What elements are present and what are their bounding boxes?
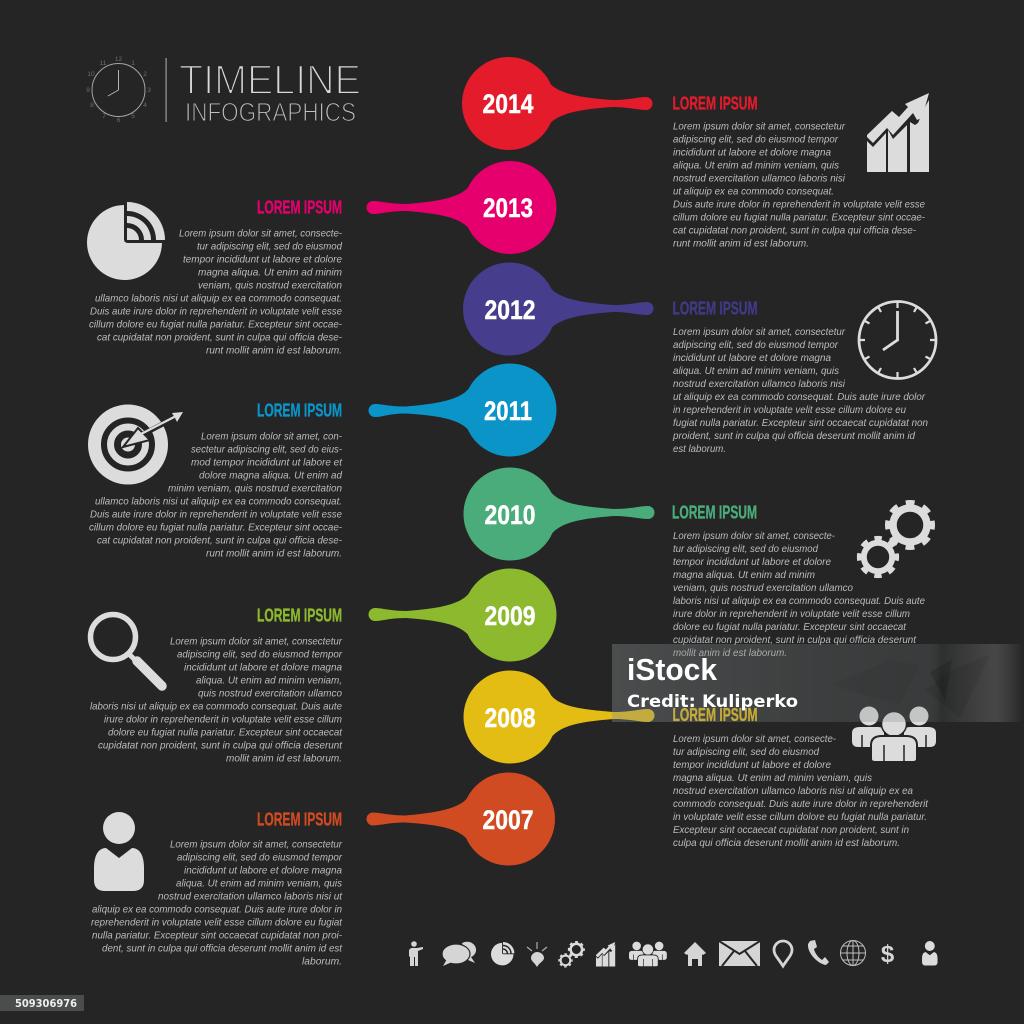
text block: Duis aute irure dolor in reprehenderit in voluptate velit esse	[90, 508, 342, 520]
heading: LOREM IPSUM	[672, 705, 758, 725]
heading: TIMELINE: TIMELINE	[179, 56, 361, 103]
text block: veniam, quis nostrud exercitation ullamco	[673, 582, 853, 594]
icon: gears	[859, 502, 932, 576]
text block: Lorem ipsum dolor sit amet, consecte-	[179, 228, 342, 240]
text block: ut aliquip ex ea commodo consequat.	[673, 186, 834, 198]
year marker: 2010: 2010	[484, 500, 536, 530]
text block	[90, 636, 343, 764]
text block: tempor incididunt ut labore et dolore	[673, 556, 831, 568]
text block	[89, 430, 343, 560]
panel: 2009	[90, 606, 343, 764]
subheading: INFOGRAPHICS: INFOGRAPHICS	[185, 97, 356, 127]
year marker: 2008	[464, 670, 655, 764]
text block: adipiscing elit, sed do eiusmod tempor	[673, 134, 838, 146]
text block: Lorem ipsum dolor sit amet, consectetur	[673, 120, 845, 132]
icon: small clock: 5	[131, 113, 135, 120]
icon: small clock: 1	[131, 60, 135, 67]
icon: people	[629, 942, 667, 967]
panel: 2011	[89, 400, 343, 560]
text block: reprehenderit in voluptate velit esse cillum dolore eu fugiat	[91, 916, 343, 928]
year marker: 2009: 2009	[484, 601, 536, 631]
text block: laborum.	[302, 956, 342, 968]
icon: small clock: 12	[115, 56, 122, 63]
year marker: 2007	[366, 772, 555, 866]
text block: incididunt ut labore et dolore magna	[673, 352, 831, 364]
text block: nostrud exercitation ullamco laboris nisi ut aliquip ex ea	[673, 785, 913, 797]
year marker: 2009	[369, 568, 556, 662]
text block: cupidatat non proident, sunt in culpa qui officia deserunt	[98, 740, 343, 752]
text block: irure dolor in reprehenderit in voluptate velit esse cillum	[673, 608, 910, 620]
text block: fugiat nulla pariatur. Excepteur sint occaecat cupidatat non	[673, 417, 928, 429]
panel: 2008	[672, 705, 936, 849]
text block: Lorem ipsum dolor sit amet, consectetur	[673, 326, 845, 338]
text block: mollit anim id est laborum.	[673, 647, 787, 659]
icon: clock	[859, 302, 936, 378]
text block: incididunt ut labore et dolore magna	[184, 662, 342, 674]
text block: magna aliqua. Ut enim ad minim	[198, 266, 342, 278]
icon: small clock: 10	[87, 71, 95, 78]
icon: small clock: 11	[100, 60, 107, 67]
text block: aliqua. Ut enim ad minim veniam, quis	[673, 365, 840, 377]
text block: veniam, quis nostrud exercitation	[198, 280, 342, 292]
text block: irure dolor in reprehenderit in voluptate velit esse cillum	[104, 714, 342, 726]
icon: chart	[596, 942, 615, 967]
icon: globe	[840, 940, 866, 966]
year marker: 2008: 2008	[484, 703, 536, 733]
credit line: Credit: Kuliperko	[627, 692, 798, 712]
text block: cillum dolore eu fugiat nulla pariatur. Excepteur sint occae-	[673, 212, 925, 224]
text block: minim veniam, quis nostrud exercitation	[168, 482, 342, 494]
text block: Lorem ipsum dolor sit amet, consecte-	[673, 733, 836, 745]
text block: in reprehenderit in voluptate velit esse cillum dolore eu	[673, 404, 906, 416]
year marker: 2010	[464, 468, 655, 560]
panel: 2012	[672, 298, 936, 455]
icon: pie chart	[491, 942, 514, 965]
title block	[86, 56, 361, 127]
icon: phone	[808, 940, 829, 965]
text block	[673, 733, 929, 849]
heading: LOREM IPSUM	[257, 198, 342, 218]
text block: incididunt ut labore et dolore magna	[184, 864, 342, 876]
heading: LOREM IPSUM	[257, 400, 342, 420]
text block: tur adipiscing elit, sed do eiusmod	[673, 543, 819, 555]
panel: 2007	[91, 810, 343, 968]
iStock logo: iStock	[627, 652, 718, 687]
year marker: 2014: 2014	[482, 89, 534, 119]
text block: runt mollit anim id est laborum.	[673, 238, 809, 250]
text block: cillum dolore eu fugiat nulla pariatur. Excepteur sint occae-	[89, 522, 342, 534]
text block: mollit anim id est laborum.	[226, 752, 342, 764]
text block: mod tempor incididunt ut labore et	[191, 456, 343, 468]
icon: pie chart with signal	[87, 202, 165, 280]
text block: Lorem ipsum dolor sit amet, consecte-	[673, 530, 835, 542]
text block	[672, 326, 928, 455]
heading: LOREM IPSUM	[257, 810, 342, 830]
icon: small clock: 8	[90, 102, 94, 109]
text block: runt mollit anim id est laborum.	[206, 548, 342, 560]
year marker: 2007: 2007	[482, 805, 534, 835]
text block: magna aliqua. Ut enim ad minim	[673, 569, 815, 581]
text block: cillum dolore eu fugiat nulla pariatur. Excepteur sint occae-	[89, 318, 342, 330]
text block: ullamco laboris nisi ut aliquip ex ea commodo consequat.	[95, 292, 342, 304]
icon: presenter	[409, 941, 423, 966]
text block: dent, sunt in culpa qui officia deserunt mollit anim id est	[102, 942, 343, 954]
text block: in voluptate velit esse cillum dolore eu fugiat nulla pariatur.	[673, 811, 927, 823]
heading: LOREM IPSUM	[672, 502, 757, 522]
icon: envelope	[719, 941, 760, 966]
text block: aliqua. Ut enim ad minim veniam,	[196, 674, 342, 686]
text block: magna aliqua. Ut enim ad minim veniam, quis	[673, 772, 873, 784]
icon: group of people	[852, 706, 936, 762]
text block: aliqua. Ut enim ad minim veniam, quis	[673, 160, 840, 172]
text block: incididunt ut labore et dolore magna	[673, 146, 831, 158]
text block: Duis aute irure dolor in reprehenderit in voluptate velit esse	[673, 198, 925, 210]
icon: person	[922, 941, 938, 966]
text block: cat cupidatat non proident, sunt in culpa qui officia dese-	[97, 534, 342, 546]
year marker: 2011	[369, 364, 556, 456]
text block: Excepteur sint occaecat cupidatat non proident, sunt in	[673, 824, 909, 836]
text block: ullamco laboris nisi ut aliquip ex ea commodo consequat.	[95, 496, 342, 508]
text block: tur adipiscing elit, sed do eiusmod	[197, 240, 343, 252]
icon: growth chart	[867, 93, 929, 172]
image id tag: 509306976	[15, 998, 77, 1010]
text block: nostrud exercitation ullamco laboris nisi	[673, 378, 846, 390]
text block: tur adipiscing elit, sed do eiusmod	[673, 746, 820, 758]
text block	[91, 838, 343, 968]
text block: culpa qui officia deserunt mollit anim id est laborum.	[673, 837, 900, 849]
panel: 2013	[87, 198, 343, 356]
text block: commodo consequat. Duis aute irure dolor in reprehenderit	[673, 798, 929, 810]
icon: person	[94, 812, 144, 891]
heading: LOREM IPSUM	[672, 94, 758, 114]
year marker: 2012	[463, 262, 654, 356]
text block: proident, sunt in culpa qui officia deserunt mollit anim id	[672, 430, 916, 442]
icon: small clock: 3	[147, 87, 151, 94]
text block: ut aliquip ex ea commodo consequat. Duis aute irure dolor	[673, 391, 925, 403]
heading: LOREM IPSUM	[672, 298, 758, 318]
text block: quis nostrud exercitation ullamco	[198, 688, 342, 700]
text block: Duis aute irure dolor in reprehenderit in voluptate velit esse	[90, 306, 342, 318]
icon: speech bubbles	[442, 942, 476, 966]
text block: Lorem ipsum dolor sit amet, consectetur	[170, 636, 342, 648]
text block	[89, 228, 343, 356]
icon: small clock: 7	[102, 113, 106, 120]
icon row	[409, 940, 938, 968]
icon: magnifier	[90, 614, 162, 686]
text block: cat cupidatat non proident, sunt in culpa qui officia dese-	[97, 332, 342, 344]
image id tag	[0, 995, 84, 1011]
text block: adipiscing elit, sed do eiusmod tempor	[673, 339, 838, 351]
text block: tempor incididunt ut labore et dolore	[183, 254, 342, 266]
panel: 2014	[672, 93, 929, 250]
text block: sectetur adipiscing elit, sed do eius-	[191, 444, 342, 456]
year marker: 2011: 2011	[484, 396, 532, 426]
icon: small clock: 6	[117, 117, 121, 124]
icon: gears	[559, 942, 584, 967]
text block: nostrud exercitation ullamco laboris nisi ut	[158, 890, 343, 902]
icon: small clock: 4	[143, 102, 147, 109]
text block: dolore eu fugiat nulla pariatur. Excepteur sint occaecat	[108, 726, 343, 738]
panel: 2010	[672, 502, 932, 659]
icon: small clock: 9	[86, 87, 90, 94]
text block: dolore magna aliqua. Ut enim ad	[199, 470, 343, 482]
text block: dolore eu fugiat nulla pariatur. Excepteur sint occaecat	[673, 621, 907, 633]
icon: home	[684, 942, 706, 966]
text block: nostrud exercitation ullamco laboris nisi	[673, 172, 846, 184]
text block: cupidatat non proident, sunt in culpa qui officia deserunt	[673, 634, 917, 646]
year marker: 2013: 2013	[483, 193, 533, 223]
year marker: 2014	[462, 57, 652, 150]
text block: adipiscing elit, sed do eiusmod tempor	[177, 648, 342, 660]
icon: map pin	[774, 941, 792, 966]
icon: target with arrow	[94, 411, 183, 478]
watermark banner	[612, 644, 1024, 722]
text block: Lorem ipsum dolor sit amet, con-	[201, 430, 342, 442]
text block: aliquip ex ea commodo consequat. Duis aute irure dolor in	[92, 904, 342, 916]
text block: Lorem ipsum dolor sit amet, consectetur	[170, 838, 342, 850]
text block: aliqua. Ut enim ad minim veniam, quis	[176, 878, 343, 890]
year marker: 2013	[367, 161, 556, 254]
text block: est laborum.	[673, 443, 726, 455]
text block: cat cupidatat non proident, sunt in culpa qui officia dese-	[673, 224, 916, 236]
text block: laboris nisi ut aliquip ex ea commodo consequat. Duis aute	[90, 700, 342, 712]
icon: light bulb	[527, 942, 547, 967]
text block	[673, 120, 925, 250]
year marker: 2012: 2012	[484, 295, 536, 325]
text block: nulla pariatur. Excepteur sint occaecat cupidatat non proi-	[92, 930, 342, 942]
text block	[673, 530, 925, 659]
text block: tempor incididunt ut labore et dolore	[673, 759, 831, 771]
icon: small clock	[86, 56, 151, 124]
icon: small clock: 2	[143, 71, 147, 78]
icon: dollar: $	[881, 941, 895, 968]
text block: runt mollit anim id est laborum.	[206, 344, 342, 356]
text block: adipiscing elit, sed do eiusmod tempor	[177, 852, 342, 864]
text block: laboris nisi ut aliquip ex ea commodo consequat. Duis aute	[673, 595, 925, 607]
heading: LOREM IPSUM	[257, 606, 342, 626]
